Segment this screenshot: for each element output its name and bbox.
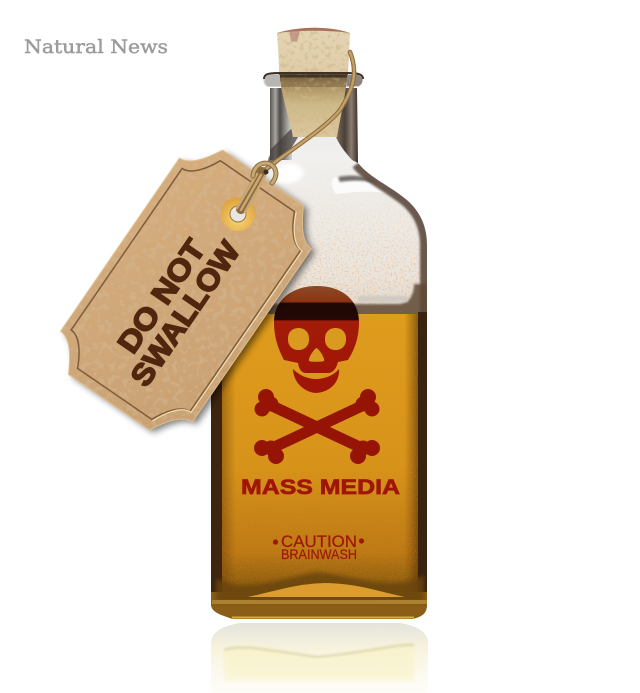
tag string knot [237,163,276,212]
bottle neck glass left [270,85,292,160]
label: BRAINWASH: BRAINWASH [281,547,357,562]
shoulder shadow [338,176,378,184]
hang tag [60,150,319,436]
crossed bones [254,389,380,464]
nose [309,348,324,362]
cork stopper [275,26,353,138]
right bottle wall [418,312,427,618]
meniscus highlight [358,296,408,302]
orange speckle on glass [276,187,422,314]
shoulder highlight [332,176,384,194]
tag border highlight [152,212,319,436]
label: CAUTION: CAUTION [281,533,357,551]
tag paper texture [62,154,310,427]
caution bullets [273,538,364,545]
bright base arc [248,583,405,597]
tag body [43,133,329,447]
skull [274,286,359,373]
tag inner border [55,145,317,435]
label: MASS MEDIA: MASS MEDIA [241,475,400,499]
shoulder highlight left [272,163,304,184]
source label: Natural News: Natural News [24,36,168,58]
dark arc at liquid bottom [216,572,424,602]
tag text: DO NOT: DO NOT [112,234,212,360]
inner glass edge orange [406,232,412,300]
eye right [325,328,346,350]
bottle lip [264,73,363,87]
infographic canvas [24,28,428,690]
bottle neck glass right [336,85,358,163]
tag shadow [47,135,333,450]
bottle reflection [211,623,428,693]
bottle [205,26,435,630]
jaw [293,369,339,393]
meniscus band [267,282,427,314]
liquid [222,314,418,594]
eye left [288,328,309,350]
bottle glass body [205,85,435,630]
glass neck pocket shadow [266,128,298,172]
skull and crossbones [254,286,380,464]
bottle base [211,592,427,619]
tag eyelet [221,197,255,231]
tag text: SWALLOW: SWALLOW [125,235,247,393]
left bottle wall [211,380,222,616]
glass edge [358,163,427,320]
string around cork [262,52,354,172]
